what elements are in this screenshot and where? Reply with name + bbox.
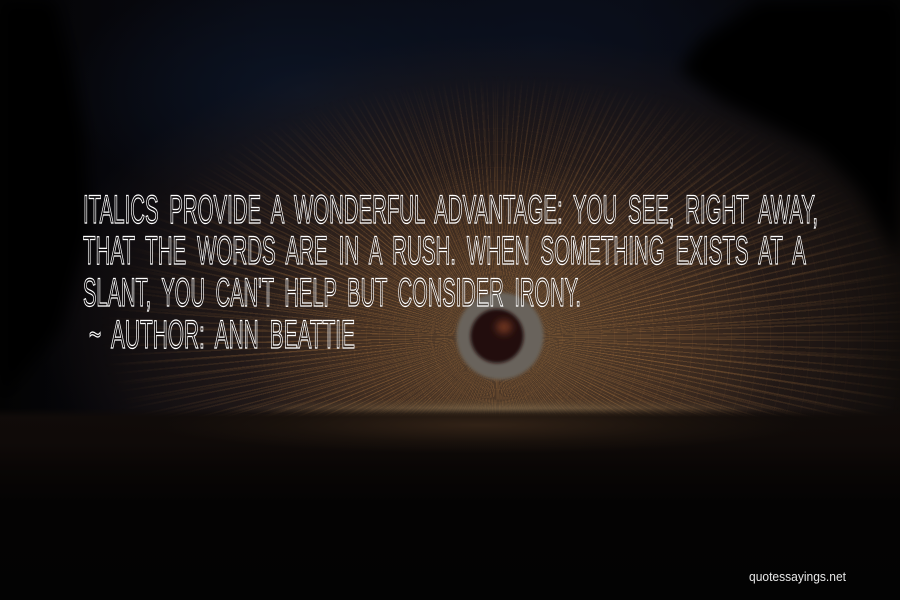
tree silhouette: left [0,0,90,400]
spark rays [129,92,890,414]
watermark: quotessayings.net [749,570,847,584]
ring opening [470,309,524,363]
glowing ring [456,292,544,380]
horizon light band [220,395,780,417]
ember spot [496,320,512,334]
ground reflection [160,414,800,470]
dark ground [0,408,900,600]
concentric spark arcs [392,196,766,403]
author line: ~ AUTHOR: ANN BEATTIE [89,313,355,357]
quote text [83,188,818,357]
tree silhouette: right [680,0,900,260]
